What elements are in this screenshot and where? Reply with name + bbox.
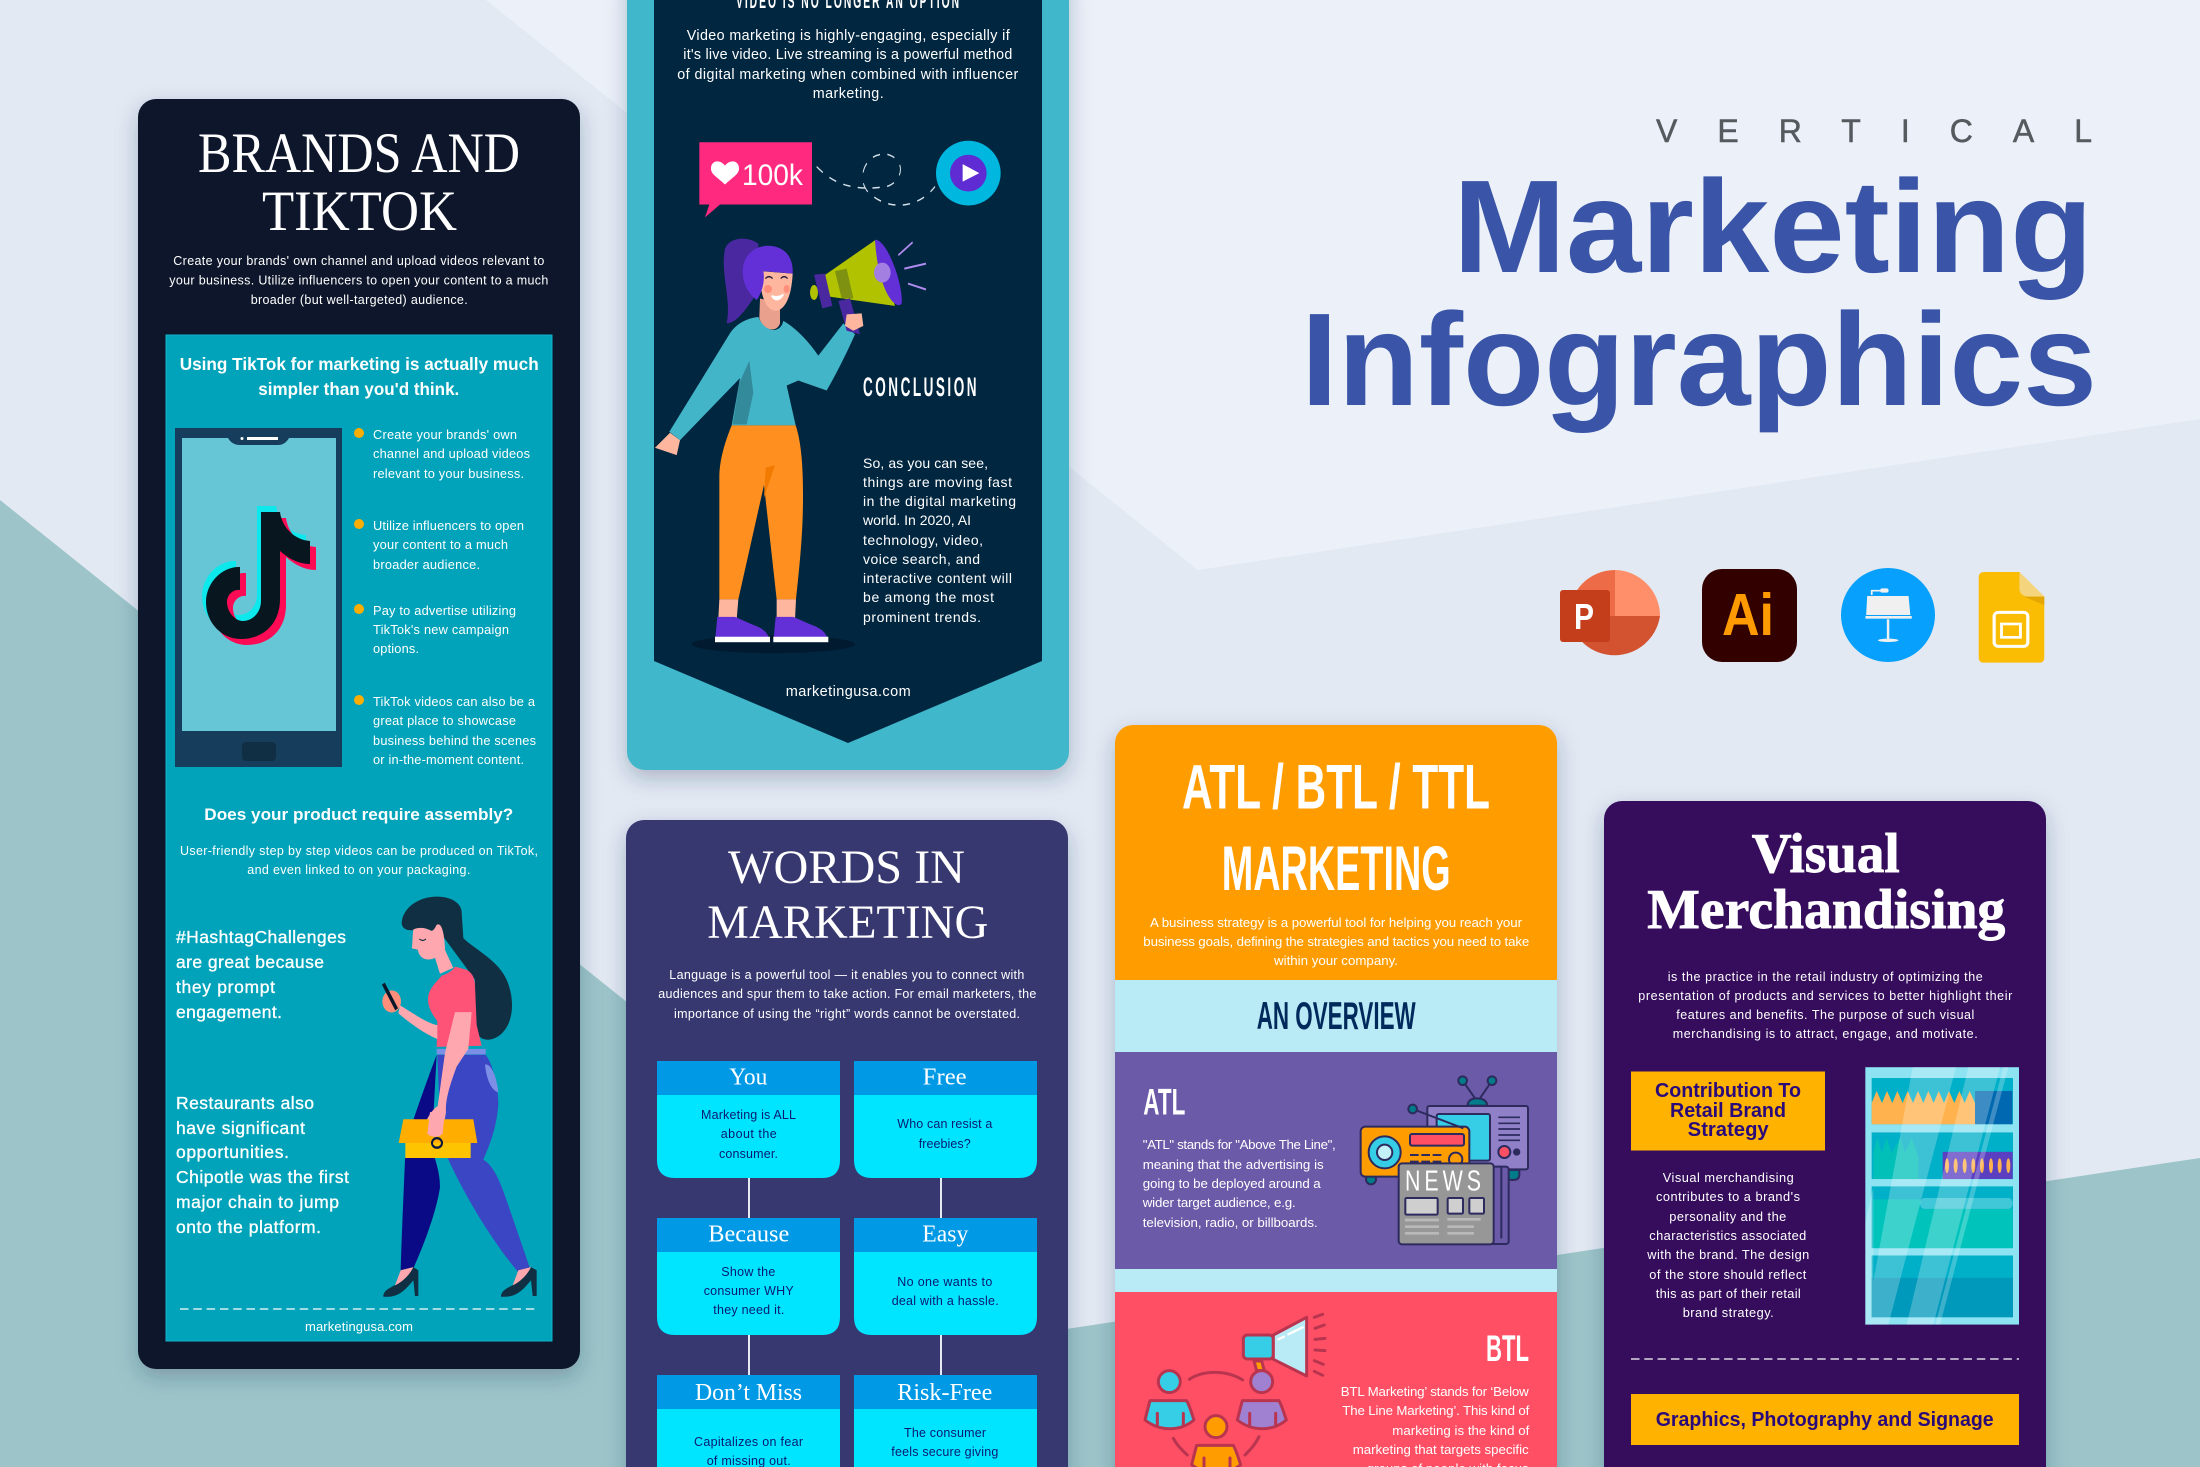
divider band [1115,1269,1557,1292]
section: BTL [1115,1292,1557,1467]
heading [707,841,988,949]
callout: graphics, photography and signage: Graphics, Photography and Signage [1656,1409,1994,1431]
intro text: importance of using the “right” words cannot be overstated. [674,1007,1020,1021]
contribution text: contributes to a brand's [1656,1189,1800,1204]
restaurants text: Chipotle was the first [176,1167,349,1187]
heading: MARKETING [707,896,988,949]
icon: Keynote [1841,568,1935,662]
section: BTL: marketing is the kind of [1392,1423,1530,1438]
card: Because [657,1218,840,1335]
intro text: your business. Utilize influencers to open your content to a much [169,274,548,288]
bullet list: business behind the scenes [373,733,536,748]
callout: contribution to retail brand strategy: Retail Brand [1670,1100,1786,1122]
title block [1301,113,2097,433]
footer url: marketingusa.com [786,684,911,700]
restaurants text: onto the platform. [176,1217,321,1237]
intro text [677,28,1019,102]
heading [1647,823,2005,941]
callout: contribution to retail brand strategy: Contribution To [1655,1080,1801,1102]
card: Because: Because [708,1222,789,1248]
intro text: business goals, defining the strategies and tactics you need to take [1143,934,1529,949]
card: Because: consumer WHY [704,1284,794,1298]
intro text: of digital marketing when combined with influencer [677,67,1019,83]
conclusion text: voice search, and [863,551,980,567]
overview band [1115,980,1557,1052]
section: ATL: ATL [1143,1082,1185,1122]
callout: graphics, photography and signage [1631,1394,2019,1445]
panel: words in marketing [626,820,1068,1467]
restaurants text: have significant [176,1118,305,1138]
intro text: broader (but well-targeted) audience. [251,293,468,307]
card: You: consumer. [719,1147,778,1161]
hashtag text [176,927,346,1022]
restaurants text: major chain to jump [176,1192,339,1212]
panel: visual merchandising [1604,801,2046,1467]
conclusion text [862,455,1016,625]
conclusion text: interactive content will [863,570,1012,586]
section: ATL: meaning that the advertising is [1143,1157,1324,1172]
contribution text: of the store should reflect [1649,1267,1807,1282]
intro text: features and benefits. The purpose of such visual [1676,1008,1974,1022]
intro text [169,254,548,307]
restaurants text: Restaurants also [176,1093,314,1113]
conclusion text: be among the most [863,589,994,605]
assembly text [180,844,538,877]
section: BTL: The Line Marketing’. This kind of [1342,1403,1530,1418]
hashtag text: are great because [176,952,324,972]
section: BTL: marketing that targets specific [1353,1442,1529,1457]
intro text: marketing. [813,86,884,102]
intro text: it's live video. Live streaming is a powerful method [683,47,1012,63]
contribution text [1646,1170,1809,1320]
bullet list: Pay to advertise utilizing [373,603,516,618]
card: Free: Free [923,1064,967,1090]
intro text: audiences and spur them to take action. For email marketers, the [658,987,1036,1001]
contribution text: with the brand. The design [1646,1247,1809,1262]
heading: ATL / BTL / TTL [1182,752,1490,822]
conclusion text: things are moving fast [863,474,1012,490]
panel: video marketing and conclusion [627,0,1069,770]
conclusion text: world. In 2020, AI [862,512,971,528]
card: Risk-Free [854,1375,1037,1467]
card: Risk-Free: feels secure giving [891,1445,998,1459]
heading [1182,752,1490,904]
assembly text: and even linked to on your packaging. [247,863,470,877]
conclusion text: prominent trends. [863,609,981,625]
card: Easy [854,1218,1037,1335]
panel: brands and tiktok [138,99,580,1369]
title line 1: Marketing [1453,153,2093,300]
restaurants text [176,1093,349,1237]
bullet list: relevant to your business. [373,466,524,481]
bullet list: great place to showcase [373,713,516,728]
card: Because: they need it. [713,1303,784,1317]
hashtag text: engagement. [176,1002,282,1022]
card: You [657,1061,840,1178]
panel: ATL BTL TTL marketing [1115,725,1557,1467]
card: Free: freebies? [919,1137,971,1151]
card: Don't Miss: Capitalizes on fear [694,1435,803,1449]
card: You: Marketing is ALL [701,1108,796,1122]
like count: 100k [742,159,804,192]
icon: Google Slides [1979,572,2044,663]
intro text [1638,970,2012,1041]
restaurants text: opportunities. [176,1142,289,1162]
heading: WORDS IN [728,841,965,894]
section: ATL: television, radio, or billboards. [1143,1215,1318,1230]
section: BTL: BTL Marketing’ stands for ‘Below [1341,1384,1529,1399]
intro text: Video marketing is highly-engaging, especially if [687,28,1010,44]
bullet list [354,427,536,767]
intro text: Language is a powerful tool — it enables you to connect with [669,968,1024,982]
card: Don't Miss [657,1375,840,1467]
conclusion text: So, as you can see, [863,455,988,471]
bullet list: TikTok's new campaign [373,622,509,637]
conclusion text: in the digital marketing [863,493,1016,509]
illustration: store shelves [1865,1067,2019,1325]
card: Risk-Free: Risk-Free [897,1380,992,1406]
intro text [1143,915,1529,968]
intro text [658,968,1036,1021]
illustration: megaphone and people [1145,1314,1325,1467]
bullet list: or in-the-moment content. [373,752,524,767]
bullet list: Create your brands' own [373,427,517,442]
icon: PowerPoint [1560,570,1660,655]
icon: Illustrator: Ai [1722,582,1774,648]
contribution text: Visual merchandising [1663,1170,1794,1185]
contribution text: characteristics associated [1649,1228,1806,1243]
intro text: presentation of products and services to better highlight their [1638,989,2012,1003]
card: Free: Who can resist a [897,1117,992,1131]
card: Free [854,1061,1037,1178]
title kicker: VERTICAL [1656,113,2092,149]
card: You: about the [721,1127,777,1141]
hashtag text: they prompt [176,977,275,997]
icon: Illustrator [1702,569,1797,662]
intro text: is the practice in the retail industry of optimizing the [1668,970,1983,984]
software icons row [1560,568,2044,663]
heading [198,122,520,243]
heading: BRANDS AND [198,122,520,185]
bullet list: TikTok videos can also be a [373,694,536,709]
callout: contribution to retail brand strategy: Strategy [1688,1119,1770,1141]
heading: TIKTOK [262,180,457,243]
card: Easy: Easy [922,1222,968,1248]
phone illustration [175,428,342,767]
icon: PowerPoint: P [1574,596,1594,637]
assembly text: User-friendly step by step videos can be produced on TikTok, [180,844,538,858]
subheading: simpler than you'd think. [258,379,459,399]
section: ATL [1115,1052,1557,1269]
footer url: marketingusa.com [305,1319,413,1334]
section: ATL: going to be deployed around a [1143,1176,1321,1191]
contribution text: personality and the [1669,1209,1786,1224]
subheading: Using TikTok for marketing is actually much [180,354,539,374]
heading: MARKETING [1222,834,1451,904]
bullet list: Utilize influencers to open [373,518,524,533]
contribution text: brand strategy. [1683,1305,1774,1320]
bullet list: your content to a much [373,537,508,552]
intro text: Create your brands' own channel and upload videos relevant to [173,254,544,268]
bullet list: options. [373,641,419,656]
card: Because: Show the [721,1265,775,1279]
card: Don't Miss: Don’t Miss [695,1380,802,1406]
heading: Visual [1752,823,1900,885]
inner teal panel [166,335,552,1341]
section: ATL: wider target audience, e.g. [1142,1195,1296,1210]
illustration: woman with phone and box [382,897,537,1297]
intro text: A business strategy is a powerful tool for helping you reach your [1150,915,1523,930]
illustration: tv, radio and newspaper [1361,1076,1528,1244]
card: Risk-Free: The consumer [904,1426,986,1440]
overview band: AN OVERVIEW [1257,995,1416,1038]
bullet list: channel and upload videos [373,446,530,461]
callout: contribution to retail brand strategy [1631,1072,1825,1150]
title line 2: Infographics [1301,286,2097,433]
card: Easy: No one wants to [897,1275,992,1289]
intro text: merchandising is to attract, engage, and motivate. [1673,1027,1978,1041]
bullet list: broader audience. [373,557,480,572]
contribution text: this as part of their retail [1656,1286,1801,1301]
card: You: You [729,1064,767,1090]
news lettering: NEWS [1405,1166,1485,1198]
assembly question: Does your product require assembly? [204,805,513,824]
heading: Merchandising [1647,879,2005,941]
icon: tiktok logo [202,506,316,645]
card: Easy: deal with a hassle. [892,1294,999,1308]
subheading [180,354,539,399]
illustration: woman with megaphone [655,239,926,653]
conclusion text: technology, video, [863,532,983,548]
illustration: like badge, dashed path and play button [699,141,1001,217]
hashtag text: #HashtagChallenges [176,927,346,947]
intro text: within your company. [1273,953,1398,968]
section: ATL: "ATL" stands for "Above The Line", [1143,1137,1336,1152]
inner banner [654,0,1042,743]
section: BTL: BTL [1486,1328,1529,1369]
conclusion heading: CONCLUSION [863,372,979,402]
